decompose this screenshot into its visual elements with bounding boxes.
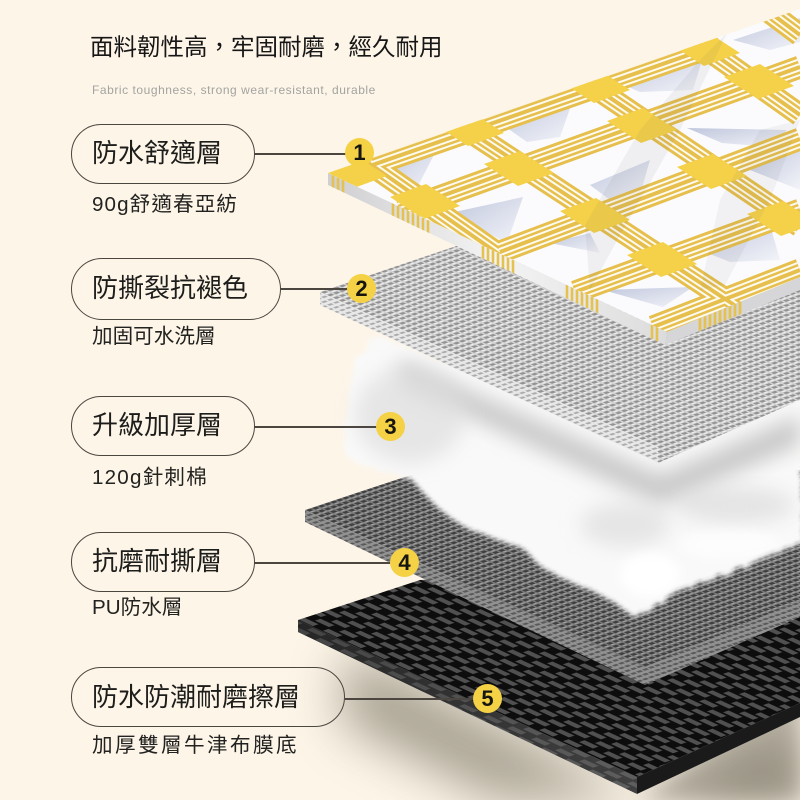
label 2 number: 2 xyxy=(355,276,368,301)
layer 1: yellow plaid quilted top xyxy=(317,5,800,345)
label 2 pill: 防撕裂抗褪色 xyxy=(92,273,248,303)
label 3 leader xyxy=(254,426,378,428)
quilt shading xyxy=(385,18,800,307)
plaid crossings xyxy=(317,31,800,277)
label 4 description: PU防水層 xyxy=(92,596,182,619)
label 5 leader xyxy=(345,698,475,700)
label 1 number xyxy=(345,138,374,167)
label 5 pill xyxy=(71,667,345,727)
label 3 number: 3 xyxy=(384,414,397,439)
label 4 number: 4 xyxy=(398,550,411,575)
label 4 leader xyxy=(254,562,390,564)
label 4 pill: 抗磨耐撕層 xyxy=(92,546,222,576)
label 5 number: 5 xyxy=(481,686,494,711)
fold shadows xyxy=(585,33,727,290)
title: 面料韌性高，牢固耐磨，經久耐用 xyxy=(90,34,442,60)
layer 4: dark grey weave xyxy=(305,470,800,685)
layer 3: cotton batting xyxy=(345,337,800,618)
label 3 pill xyxy=(71,396,255,456)
label 5 pill: 防水防潮耐磨擦層 xyxy=(92,682,300,712)
label 2 leader xyxy=(280,288,348,290)
label 5 number xyxy=(473,684,502,713)
ground shadow xyxy=(340,650,800,800)
subtitle: Fabric toughness, strong wear-resistant, durable xyxy=(92,83,376,97)
label 4 pill xyxy=(71,532,255,592)
layer 2: light grey weave xyxy=(320,238,800,463)
label 3 description: 120g針刺棉 xyxy=(92,466,208,489)
label 4 number xyxy=(390,548,419,577)
label 2 number xyxy=(347,274,376,303)
plaid bands xyxy=(338,5,800,327)
label 1 description: 90g舒適春亞紡 xyxy=(92,193,238,216)
label 3 pill: 升級加厚層 xyxy=(92,410,222,440)
label 3 number xyxy=(376,412,405,441)
label 1 pill: 防水舒適層 xyxy=(92,138,222,168)
label 5 description: 加厚雙層牛津布膜底 xyxy=(92,734,299,757)
label 1 leader xyxy=(254,153,349,155)
side stripes xyxy=(333,175,657,341)
label 2 description: 加固可水洗層 xyxy=(92,325,216,348)
label 1 number: 1 xyxy=(353,140,366,165)
label 2 pill xyxy=(71,258,281,320)
layered fabric illustration xyxy=(298,9,800,800)
layer 5: black carbon base xyxy=(298,560,800,794)
label 1 pill xyxy=(71,124,255,184)
